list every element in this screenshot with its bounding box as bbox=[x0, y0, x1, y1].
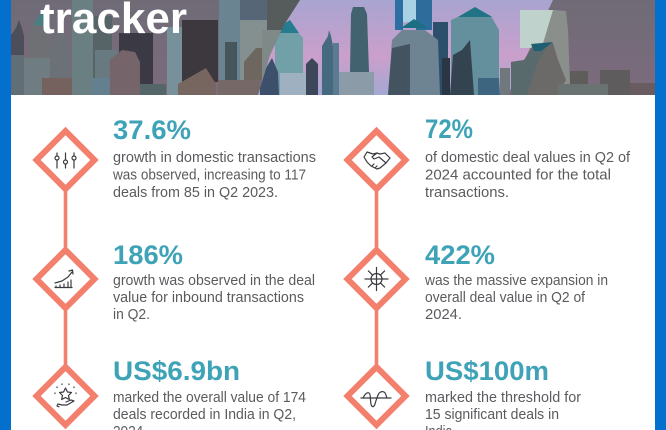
description: transactions. bbox=[425, 184, 509, 201]
header skyline image bbox=[11, 0, 655, 95]
description: marked the threshold for bbox=[425, 389, 581, 406]
diamond marker with network globe icon bbox=[348, 250, 406, 308]
stat: 37.6% domestic transactions bbox=[36, 115, 316, 201]
description: 15 significant deals in bbox=[425, 406, 559, 423]
value: 186% bbox=[113, 240, 183, 270]
value: US$100m bbox=[425, 356, 549, 386]
description bbox=[112, 149, 316, 201]
stat: 72% domestic deal values bbox=[348, 114, 631, 201]
left timeline connector bbox=[64, 188, 67, 368]
description: deals from 85 in Q2 2023. bbox=[113, 184, 278, 201]
description: was the massive expansion in bbox=[424, 272, 608, 289]
description: growth was observed in the deal bbox=[113, 272, 315, 289]
stat: US$100m threshold bbox=[348, 356, 581, 430]
description: value for inbound transactions bbox=[113, 289, 304, 306]
stat: US$6.9bn overall value bbox=[36, 356, 306, 430]
description: of domestic deal values in Q2 of bbox=[425, 149, 631, 166]
diamond marker with sliders icon bbox=[36, 131, 94, 189]
stat: 186% inbound deal value bbox=[36, 240, 315, 323]
description bbox=[113, 272, 315, 323]
description: marked the overall value of 174 bbox=[113, 389, 306, 406]
description: growth in domestic transactions bbox=[113, 149, 316, 166]
description bbox=[425, 149, 631, 201]
description bbox=[113, 389, 306, 430]
description: 2024. bbox=[425, 306, 462, 323]
description: deals recorded in India in Q2, bbox=[113, 406, 296, 423]
diamond marker with star in hand icon bbox=[36, 367, 94, 425]
value: 422% bbox=[425, 240, 495, 270]
value: 72% bbox=[425, 114, 473, 144]
description: was observed, increasing to 117 bbox=[112, 166, 306, 184]
description: 2024 accounted for the total bbox=[425, 166, 611, 184]
diamond marker with handshake icon bbox=[348, 131, 406, 189]
right timeline connector bbox=[375, 188, 378, 368]
description bbox=[424, 272, 608, 323]
description bbox=[425, 389, 581, 430]
diamond marker with growth chart icon bbox=[36, 250, 94, 308]
right blue side bar bbox=[655, 0, 666, 430]
value: US$6.9bn bbox=[113, 356, 240, 386]
description: in Q2. bbox=[113, 306, 150, 323]
value: 37.6% bbox=[113, 115, 191, 145]
stat: 422% overall deal value bbox=[348, 240, 608, 323]
diamond marker with wave icon bbox=[348, 367, 406, 425]
left blue side bar bbox=[0, 0, 11, 430]
description: overall deal value in Q2 of bbox=[425, 289, 586, 306]
